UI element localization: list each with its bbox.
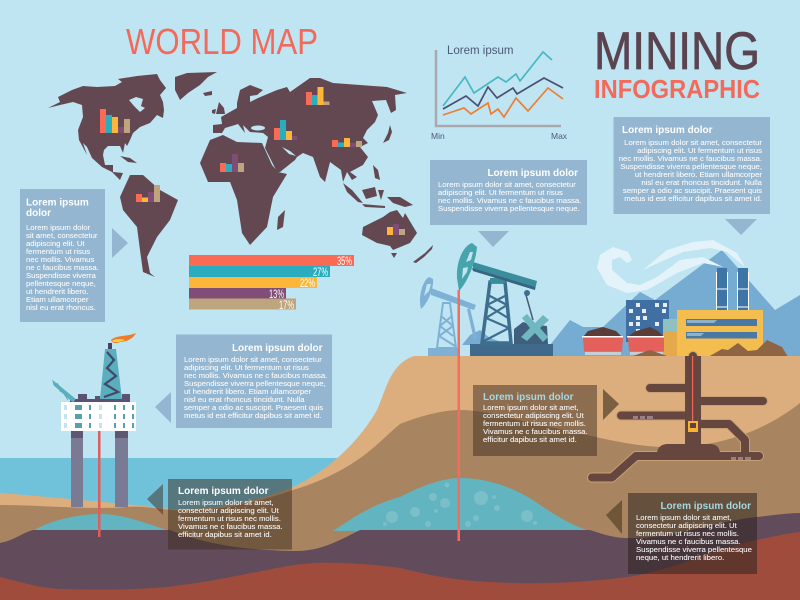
left water lens <box>33 514 170 531</box>
panel: pump note: Suspendisse viverra pellentesque neque. <box>438 204 580 213</box>
panel: seabed note: fermentum ut risus nec mollis. <box>178 514 281 523</box>
line chart: Min <box>431 131 445 141</box>
panel: deep layers note: Suspendisse viverra pellentesque <box>636 545 752 554</box>
panel: deep layers note: Lorem ipsum dolor sit amet, <box>636 513 732 522</box>
panel: rig note: Suspendisse viverra pellentesque neque, <box>184 379 326 388</box>
ground: sand layer <box>0 356 800 600</box>
panel: factory note: metus id est efficitur dapibus sit amet id. <box>624 194 762 203</box>
right water lens <box>333 478 590 531</box>
panel: factory note: Lorem ipsum dolor sit amet, consectetur <box>624 138 762 147</box>
panel: left map note: fermentum ut risus <box>26 247 90 256</box>
horizontal percentage bar chart: 13% <box>269 287 284 301</box>
panel: rig note <box>176 334 332 428</box>
panel: rig note: Lorem ipsum dolor sit amet, consectetur <box>184 355 322 364</box>
panel: mine note: efficitur dapibus sit amet id. <box>483 435 577 444</box>
drill line: pump <box>458 290 460 541</box>
panel: factory note: nisl eu erat rhoncus tincidunt. Nulla <box>641 178 763 187</box>
panel: pump note: adipiscing elit. Ut fermentum ut risus <box>438 188 563 197</box>
title: world map: WORLD MAP <box>126 21 318 62</box>
map mini bar chart: Australia <box>387 224 405 235</box>
panel: left map note <box>20 189 105 322</box>
horizontal percentage bar chart: 27% <box>313 265 328 279</box>
panel: left map note: Lorem ipsum <box>26 198 89 208</box>
panel: pump note: Lorem ipsum dolor sit amet, consectetur <box>438 180 576 189</box>
ground: brown layer <box>0 403 800 600</box>
panel: deep layers note: neque, ut hendrerit libero. <box>636 553 724 562</box>
horizontal percentage bar chart: 22% <box>300 276 315 290</box>
map mini bar chart: China <box>332 138 362 147</box>
chimneys <box>716 268 749 311</box>
line chart: Lorem ipsum <box>447 45 513 57</box>
panel: seabed note: Lorem ipsum dolor <box>178 486 269 497</box>
panel: deep layers note <box>628 493 757 574</box>
panel: left map note: ut hendrerit libero. <box>26 287 88 296</box>
panel: mine note: consectetur adipiscing elit. Ut <box>483 411 585 420</box>
map mini bar chart: Russia <box>306 87 330 105</box>
map mini bar chart: Middle East <box>274 120 297 140</box>
panel: left map note: nisl eu erat rhoncus. <box>26 303 96 312</box>
small oil pump <box>420 277 477 358</box>
panel: factory note: Suspendisse viverra pellentesque neque, <box>620 162 762 171</box>
panel: rig note: ut hendrerit libero. Etiam ullamcorper <box>184 387 311 396</box>
panel: left map note: pellentesque neque, <box>26 279 96 288</box>
panel: seabed note: Lorem ipsum dolor sit amet, <box>178 498 274 507</box>
panel: left map note: ne c faucibus massa. <box>26 263 99 272</box>
factory <box>663 310 763 356</box>
panel: rig note: semper a odio ac suscipit. Praesent quis <box>184 403 323 412</box>
map mini bar chart: North America <box>100 109 130 133</box>
panel: mine note: Lorem ipsum dolor <box>483 392 574 403</box>
panel: mine note: Lorem ipsum dolor sit amet, <box>483 403 579 412</box>
smoke <box>597 240 745 293</box>
ground: red layer <box>0 532 800 600</box>
ground: purple layer <box>0 513 800 600</box>
rubble piles <box>630 340 788 357</box>
panel: left map note: sit amet, consectetur <box>26 231 98 240</box>
panel: rig note: nec mollis. Vivamus ne c faucibus massa. <box>184 371 327 380</box>
mine carts with coal <box>582 327 664 355</box>
panel: mine note: fermentum ut risus nec mollis. <box>483 419 586 428</box>
panel: left map note: Suspendisse viverra <box>26 271 96 280</box>
panel: seabed note: consectetur adipiscing elit. Ut <box>178 506 280 515</box>
panel: seabed note <box>168 479 292 550</box>
line chart: Max <box>551 131 568 141</box>
panel: left map note: adipiscing elit. Ut <box>26 239 85 248</box>
panel: deep layers note: Lorem ipsum dolor <box>660 501 751 512</box>
panel: mine note <box>473 385 597 456</box>
arrow: factory panel <box>725 219 757 235</box>
line chart <box>431 45 568 141</box>
title: mining: MINING <box>594 22 760 81</box>
map mini bar chart: South America <box>136 185 160 202</box>
panel: factory note: nec mollis. Vivamus ne c faucibus massa. <box>619 154 762 163</box>
panel: deep layers note: consectetur adipiscing elit. Ut <box>636 521 738 530</box>
panel: rig note: Lorem ipsum dolor <box>232 343 323 354</box>
arrow: mine panel <box>603 389 619 420</box>
panel: factory note: semper a odio ac suscipit. Praesent quis <box>623 186 762 195</box>
panel: pump note: nec mollis. Vivamus ne c faucibus massa. <box>438 196 581 205</box>
subtitle: infographic: INFOGRAPHIC <box>594 74 760 104</box>
arrow: left panel <box>112 228 128 258</box>
panel: left map note: nec mollis. Vivamus <box>26 255 94 264</box>
panel: left map note: dolor <box>26 208 51 219</box>
horizontal percentage bar chart <box>189 254 354 312</box>
panel: rig note: adipiscing elit. Ut fermentum ut risus <box>184 363 309 372</box>
panel: seabed note: Vivamus ne c faucibus massa. <box>178 522 283 531</box>
arrow: pump panel <box>478 231 509 247</box>
main oil pump <box>457 243 553 358</box>
blue building <box>626 300 669 342</box>
panel: left map note: Etiam ullamcorper <box>26 295 89 304</box>
ore blocks in tunnels <box>633 416 751 460</box>
panel: pump note: Lorem ipsum dolor <box>487 168 578 179</box>
panel: left map note: Lorem ipsum dolor <box>26 223 91 232</box>
arrow: seabed panel <box>147 484 163 515</box>
mine tunnels <box>592 356 763 478</box>
panel: factory note: Lorem ipsum dolor <box>622 125 713 136</box>
map mini bar chart: Africa <box>220 154 244 172</box>
mountains <box>462 250 800 360</box>
panel: pump note <box>430 160 587 225</box>
offshore oil rig <box>53 333 136 537</box>
panel: deep layers note: fermentum ut risus nec mollis. <box>636 529 739 538</box>
horizontal percentage bar chart: 17% <box>279 298 294 312</box>
panel: rig note: metus id est efficitur dapibus sit amet id. <box>184 411 322 420</box>
panel: factory note <box>614 117 770 214</box>
panel: mine note: Vivamus ne c faucibus massa. <box>483 427 588 436</box>
horizontal percentage bar chart: 35% <box>337 254 352 268</box>
world map <box>48 72 433 277</box>
arrow: deep layers panel <box>606 500 622 534</box>
panel: rig note: nisl eu erat rhoncus tincidunt. Nulla <box>184 395 305 404</box>
panel: factory note: ut hendrerit libero. Etiam ullamcorper <box>635 170 762 179</box>
mine elevator and shaft line <box>688 356 698 432</box>
arrow: rig panel <box>155 392 171 423</box>
panel: factory note: adipiscing elit. Ut fermentum ut risus <box>637 146 762 155</box>
panel: seabed note: efficitur dapibus sit amet id. <box>178 530 272 539</box>
panel: deep layers note: Vivamus ne c faucibus massa. <box>636 537 741 546</box>
sea <box>0 458 380 528</box>
